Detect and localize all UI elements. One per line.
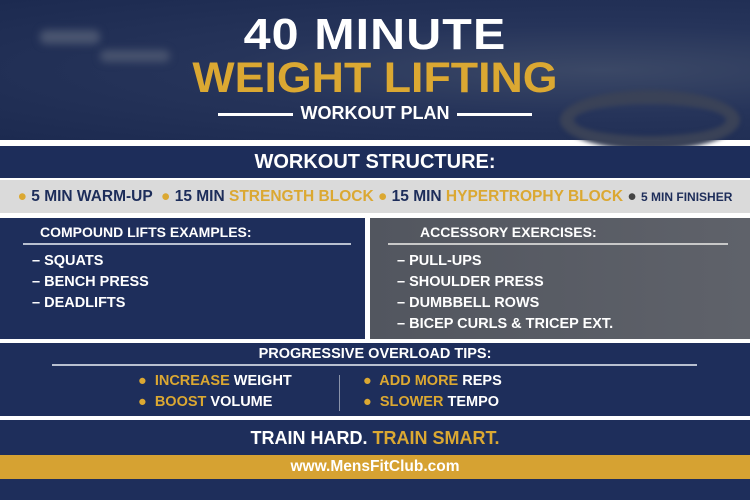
panel: progressive overload: PROGRESSIVE OVERLOAD TIPS: xyxy=(259,346,491,362)
slogan: TRAIN HARD. TRAIN SMART. xyxy=(250,428,500,448)
panel: compound lifts: – BENCH PRESS xyxy=(32,274,149,290)
panel: compound lifts: – SQUATS xyxy=(32,253,103,269)
website banner xyxy=(0,455,750,479)
panel: accessory exercises: – BICEP CURLS & TRICEP EXT. xyxy=(397,316,613,332)
title: 40 MINUTE xyxy=(244,10,506,59)
panel: progressive overload xyxy=(0,343,750,416)
heading: workout structure xyxy=(0,146,750,178)
panel: progressive overload: ● ADD MORE REPS xyxy=(363,373,502,389)
panel: accessory exercises: – DUMBBELL ROWS xyxy=(397,295,539,311)
panel: accessory exercises: – SHOULDER PRESS xyxy=(397,274,544,290)
panel: compound lifts: COMPOUND LIFTS EXAMPLES: xyxy=(40,224,252,240)
heading: workout structure: WORKOUT STRUCTURE: xyxy=(254,151,496,173)
panel: compound lifts xyxy=(0,218,365,339)
panel: progressive overload: ● INCREASE WEIGHT xyxy=(138,373,292,389)
panel: progressive overload: ● BOOST VOLUME xyxy=(138,394,272,410)
panel: compound lifts: – DEADLIFTS xyxy=(32,295,125,311)
title: WEIGHT LIFTING xyxy=(192,54,558,102)
structure items: ● 5 MIN WARM-UP ● 15 MIN STRENGTH BLOCK ● 15 MIN HYPERTROPHY BLOCK ● 5 MIN FINISHER xyxy=(18,188,732,205)
slogan xyxy=(0,420,750,456)
title xyxy=(192,10,558,123)
hero background xyxy=(0,0,750,140)
panel: accessory exercises: – PULL-UPS xyxy=(397,253,482,269)
title: WORKOUT PLAN xyxy=(300,103,449,123)
panel: accessory exercises: ACCESSORY EXERCISES: xyxy=(420,224,597,240)
website banner: www.MensFitClub.com xyxy=(290,458,460,475)
panel: accessory exercises xyxy=(370,218,750,339)
panel: progressive overload: ● SLOWER TEMPO xyxy=(363,394,499,410)
structure items xyxy=(0,180,750,213)
